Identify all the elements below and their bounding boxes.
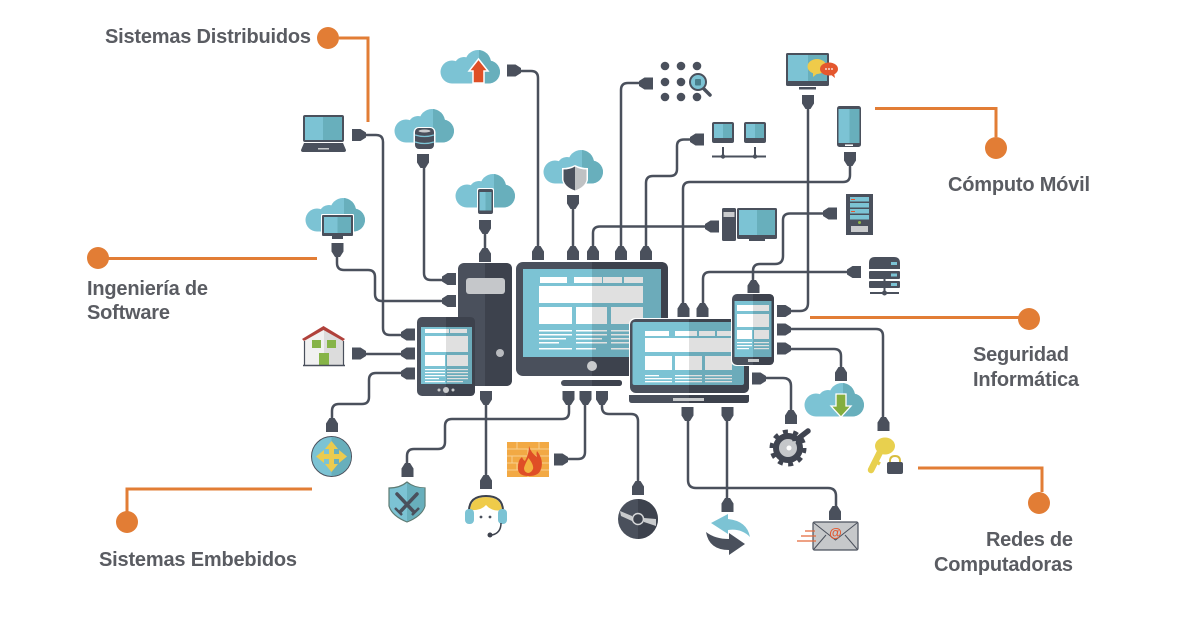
icon: cloud phone (456, 174, 515, 215)
icon: email envelope (797, 522, 858, 550)
tablet (417, 317, 475, 396)
callout: Ingeniería de Software: Software (87, 302, 170, 324)
wires: network cables (332, 71, 883, 509)
icon: cloud monitor (306, 198, 365, 240)
callout: Sistemas Distribuidos: Sistemas Distribuidos (105, 26, 311, 48)
callout: Ingeniería de Software (87, 247, 317, 324)
computer tower (458, 263, 512, 386)
icon: support agent with headset (465, 496, 507, 538)
central desktop monitor (516, 262, 668, 386)
callout: Cómputo Móvil: Cómputo Móvil (948, 174, 1090, 196)
icon: key and padlock (871, 438, 903, 474)
icon: monitor with chat bubbles (786, 53, 838, 90)
icon: sync arrows (706, 514, 750, 555)
callout: Redes de Computadoras (918, 468, 1073, 576)
icon: firewall (507, 442, 549, 477)
plugs: cable connectors (326, 64, 890, 520)
icon: laptop (301, 115, 346, 152)
callout: Sistemas Embebidos: Sistemas Embebidos (99, 549, 297, 571)
icon: server rack (846, 194, 873, 235)
callout: Ingeniería de Software: Ingeniería de (87, 278, 208, 300)
icon: compass router (312, 436, 352, 476)
callout: Seguridad Informática (810, 308, 1080, 391)
icon: networked terminals (712, 122, 766, 159)
smartphone (731, 293, 775, 366)
callout: Seguridad Informática: Informática (973, 369, 1080, 391)
icon: desktop computer (722, 208, 777, 241)
callout: Seguridad Informática: Seguridad (973, 344, 1069, 366)
callout: Sistemas Distribuidos (105, 26, 368, 122)
callout: Redes de Computadoras: Redes de (986, 529, 1073, 551)
icon: email envelope: @ (829, 525, 842, 540)
icon: server stack (869, 257, 900, 296)
icon: dot grid with magnifier (661, 62, 710, 101)
callout: Sistemas Embebidos (99, 489, 312, 571)
icon: cloud upload (440, 50, 500, 84)
icon: house (302, 326, 345, 366)
icon: optical disc (618, 499, 658, 539)
callout: Redes de Computadoras: Computadoras (934, 554, 1073, 576)
icon: mobile phone (837, 106, 861, 147)
icon: cloud database (394, 109, 454, 151)
icon: shield with swords (389, 482, 425, 522)
icon: gear with wrench (772, 431, 808, 464)
callout: Cómputo Móvil (875, 108, 1090, 196)
icon: cloud shield (544, 150, 603, 192)
laptop (629, 318, 749, 403)
icon: cloud download (804, 383, 864, 417)
